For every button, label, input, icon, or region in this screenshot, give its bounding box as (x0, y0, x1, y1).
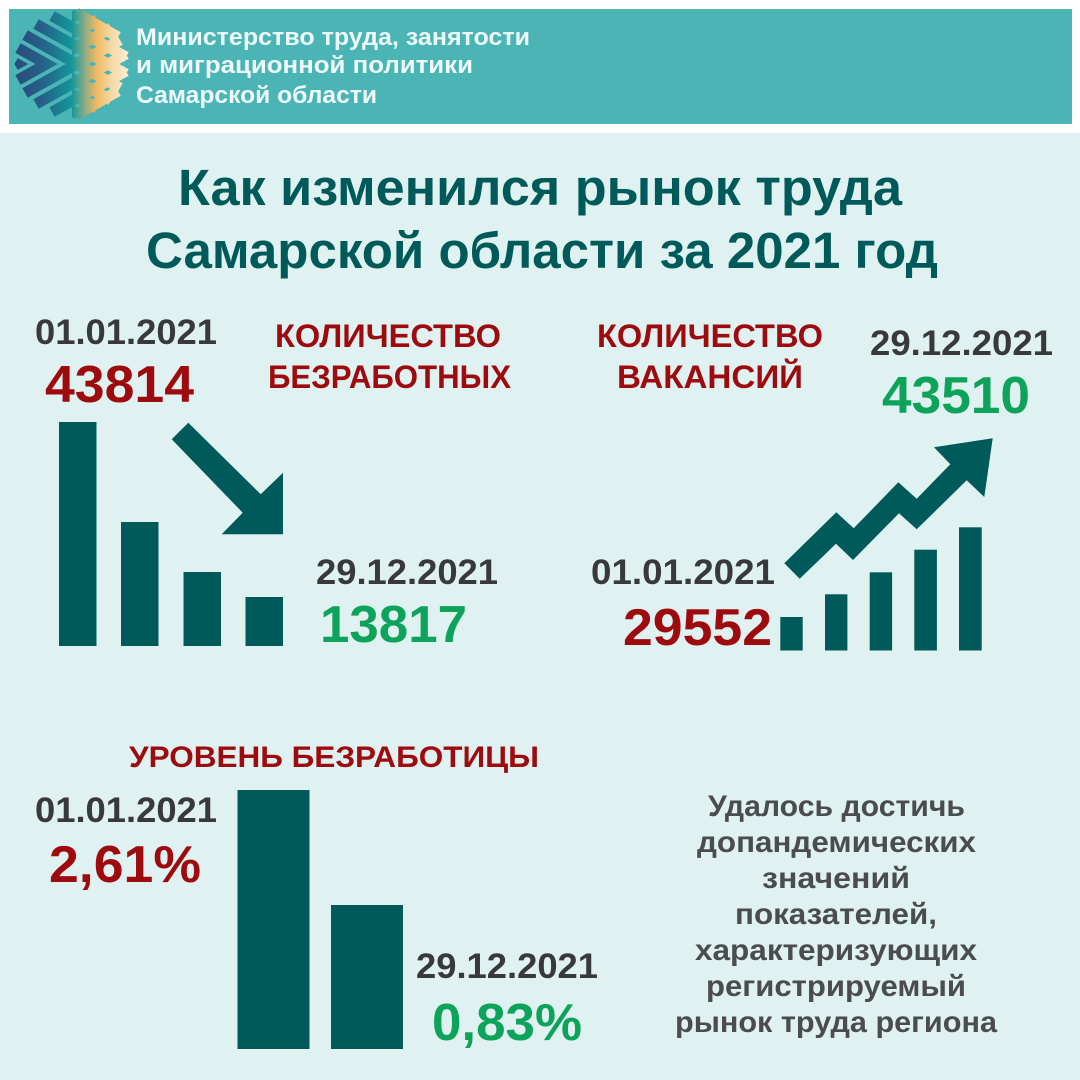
header text: Самарской области (136, 82, 377, 109)
number: start rate: 2,61% (49, 836, 201, 894)
text block: conclusion: характеризующих (695, 934, 977, 967)
bar chart: rising vacancies (780, 527, 982, 650)
date: end rate: 29.12.2021 (416, 947, 598, 986)
title (146, 159, 938, 279)
title: Как изменился рынок труда (178, 159, 903, 216)
heading: unemployed count: КОЛИЧЕСТВО (275, 318, 501, 354)
date: start vacancies: 01.01.2021 (591, 553, 775, 592)
text block: conclusion: значений (762, 862, 910, 895)
bar chart: falling unemployment (59, 422, 283, 646)
text block: conclusion (675, 790, 997, 1039)
header banner (9, 9, 1072, 124)
number: start unemployed: 43814 (45, 356, 194, 414)
heading: unemployed count: БЕЗРАБОТНЫХ (268, 359, 512, 395)
date: start rate: 01.01.2021 (35, 791, 217, 830)
text block: conclusion: допандемических (697, 826, 976, 859)
date: end vacancies: 29.12.2021 (870, 324, 1053, 363)
title: Самарской области за 2021 год (146, 222, 938, 279)
icon: ministry logo (15, 13, 126, 115)
header text: и миграционной политики (136, 52, 473, 79)
panel: unemployment rate (35, 741, 598, 1052)
bar chart: rate comparison (238, 790, 403, 1049)
panel: unemployed count (35, 313, 512, 654)
heading: vacancies count (597, 318, 823, 395)
number: start vacancies: 29552 (623, 599, 772, 657)
text block: conclusion: рынок труда региона (675, 1006, 997, 1039)
arrow: up zigzag (784, 438, 993, 579)
date: end unemployed: 29.12.2021 (316, 553, 498, 592)
heading: vacancies count: ВАКАНСИЙ (617, 359, 803, 395)
number: end rate: 0,83% (432, 994, 582, 1052)
header text (136, 24, 530, 109)
text block: conclusion: показателей, (735, 898, 937, 931)
heading: vacancies count: КОЛИЧЕСТВО (597, 318, 823, 354)
panel: vacancies count (591, 318, 1053, 657)
number: end unemployed: 13817 (320, 596, 467, 654)
heading: unemployment rate: УРОВЕНЬ БЕЗРАБОТИЦЫ (129, 741, 539, 774)
number: end vacancies: 43510 (882, 367, 1030, 425)
text block: conclusion: регистрируемый (706, 970, 966, 1003)
date: start unemployed: 01.01.2021 (35, 313, 217, 352)
arrow: down (172, 423, 283, 534)
heading: unemployed count (268, 318, 512, 395)
header text: Министерство труда, занятости (136, 24, 530, 51)
text block: conclusion: Удалось достичь (708, 790, 965, 823)
